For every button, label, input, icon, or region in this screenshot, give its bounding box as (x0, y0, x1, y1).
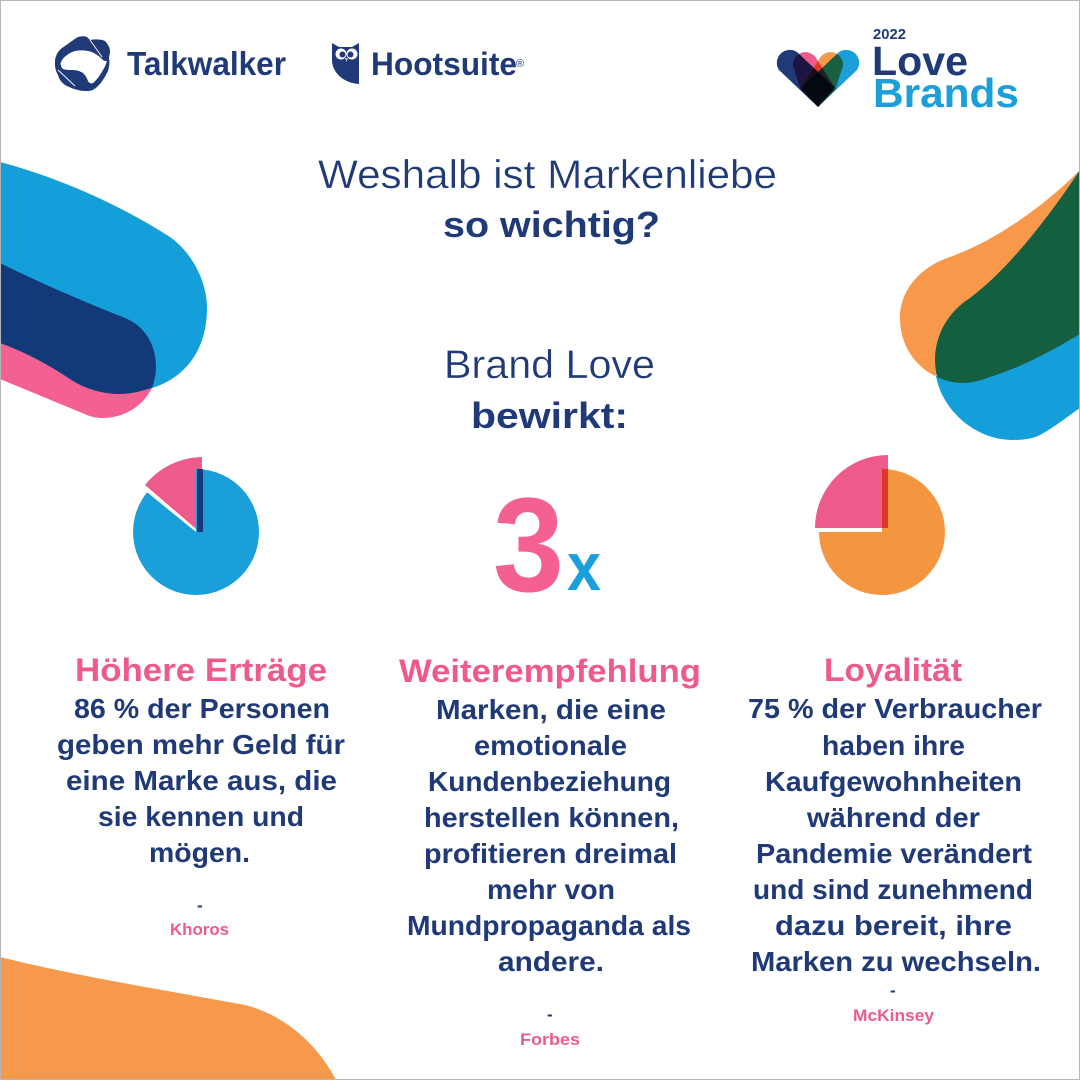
wordmark: Hootsuite: Hootsuite (371, 46, 517, 82)
body text (57, 693, 345, 868)
body text: während der (806, 802, 980, 833)
label: Love: Love (872, 38, 968, 84)
icon: Talkwalker mark (55, 36, 110, 91)
body text: Marken, die eine (436, 694, 666, 725)
body text: emotionale (474, 730, 627, 761)
heading: Weiterempfehlung (399, 653, 701, 689)
source: Khoros: - (197, 896, 203, 915)
heading: Höhere Erträge (75, 652, 327, 688)
source: McKinsey (853, 981, 935, 1025)
label: 2022: 2022 (873, 26, 906, 43)
heading: Loyalität (824, 652, 962, 688)
big number: 3x (493, 471, 601, 620)
title: so wichtig? (443, 204, 660, 245)
big number: 3x: x (567, 529, 601, 605)
subtitle: bewirkt: (471, 395, 628, 436)
decorative shape: top right blob (900, 170, 1080, 440)
body text: mögen. (149, 837, 250, 868)
decorative shape: top left blob (0, 162, 207, 418)
source: Forbes (520, 1005, 580, 1049)
body text: sie kennen und (98, 801, 304, 832)
subtitle: Brand Love (444, 343, 655, 387)
title (318, 153, 777, 245)
panel: Loyalität (748, 652, 1042, 1025)
wordmark: Talkwalker: Talkwalker (127, 45, 286, 82)
logo: 2022 Love Brands (777, 26, 1019, 116)
body text: und sind zunehmend (753, 874, 1033, 905)
registered mark: ® (516, 58, 524, 70)
source: McKinsey: - (890, 981, 896, 1000)
body text: andere. (498, 946, 604, 977)
body text (748, 693, 1042, 977)
source: Forbes: Forbes (520, 1030, 580, 1049)
body text: dazu bereit, ihre (775, 910, 1012, 941)
icon: overlapping heart (777, 50, 859, 107)
pie chart: 86 percent (133, 457, 259, 595)
body text: Marken zu wechseln. (751, 946, 1041, 977)
logo: Talkwalker (55, 36, 286, 91)
panel: Weiterempfehlung (399, 653, 701, 1049)
source: Khoros (170, 896, 229, 939)
body text: profitieren dreimal (424, 838, 677, 869)
source: Forbes: - (547, 1005, 553, 1024)
pie chart: 75 percent (815, 455, 945, 595)
body text: 75 % der Verbraucher (748, 693, 1042, 724)
body text: eine Marke aus, die (66, 765, 337, 796)
source: McKinsey: McKinsey (853, 1006, 935, 1025)
body text: Mundpropaganda als (407, 910, 691, 941)
body text: Pandemie verändert (756, 838, 1032, 869)
body text: mehr von (487, 874, 615, 905)
label: Brands: Brands (873, 70, 1019, 116)
title: Weshalb ist Markenliebe (318, 153, 777, 197)
big number: 3x: 3 (493, 471, 564, 620)
body text: Kundenbeziehung (428, 766, 671, 797)
body text: 86 % der Personen (74, 693, 330, 724)
body text: geben mehr Geld für (57, 729, 345, 760)
body text: Kaufgewohnheiten (765, 766, 1022, 797)
decorative shape: bottom left blob (0, 957, 336, 1080)
logo: Hootsuite (332, 43, 524, 84)
body text (407, 694, 691, 977)
source: Khoros: Khoros (170, 920, 229, 939)
body text: herstellen können, (424, 802, 679, 833)
panel: Höhere Erträge (57, 652, 345, 939)
body text: haben ihre (822, 730, 965, 761)
subtitle (444, 343, 655, 436)
icon: owl (332, 43, 359, 84)
